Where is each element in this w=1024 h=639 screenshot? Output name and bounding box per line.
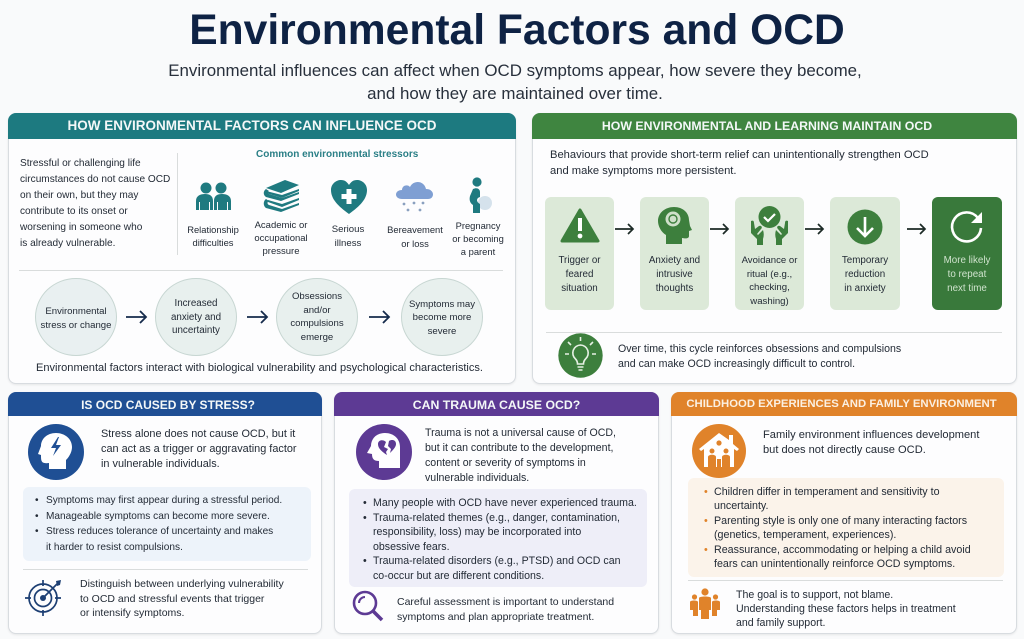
label: academic — [254, 220, 308, 257]
panel heading — [8, 113, 516, 139]
label: Trigger or — [558, 255, 601, 266]
step: environmental stress — [35, 278, 117, 356]
icon: rain cloud — [396, 182, 433, 212]
bullets — [363, 496, 637, 583]
label: relationship: Relationship — [187, 224, 239, 235]
bullets: Manageable symptoms can become more severe. — [46, 511, 270, 522]
panel: can trauma cause OCD — [334, 392, 659, 634]
lead text: content or severity of symptoms in — [425, 457, 586, 469]
flow: stress to symptoms — [35, 278, 483, 356]
lead text — [763, 428, 979, 458]
lead text: can act as a trigger or aggravating factor — [101, 443, 297, 455]
bullets: (genetics, temperament, experiences). — [714, 529, 896, 541]
note: Careful assessment is important to understand — [397, 596, 614, 608]
icon: lightbulb — [558, 333, 603, 378]
icon: repeat arrow — [950, 211, 982, 243]
icon: house with family — [692, 424, 746, 478]
label: pregnancy: or becoming — [452, 233, 504, 244]
bullets: • — [35, 511, 39, 522]
label: academic: Academic or — [255, 220, 307, 231]
step: environmental stress: Environmental — [45, 306, 107, 317]
intro text: Behaviours that provide short-term relief can unintentionally strengthen OCD — [550, 149, 929, 161]
panel heading: CHILDHOOD EXPERIENCES AND FAMILY ENVIRONMENT — [686, 398, 997, 410]
label: Avoidance or — [742, 255, 797, 266]
label: relationship — [187, 224, 239, 248]
label: relationship: difficulties — [192, 237, 234, 248]
label: serious illness — [332, 224, 364, 248]
lead text: vulnerable individuals. — [425, 472, 529, 484]
intro text: on their own, but they may — [20, 190, 138, 201]
bullet box — [23, 487, 311, 561]
label — [558, 255, 601, 294]
step: symptoms more severe — [401, 278, 483, 356]
label: academic: occupational — [254, 233, 308, 244]
icon: hands with check — [751, 206, 788, 245]
label: situation — [561, 283, 598, 294]
intro text: Stressful or challenging life — [20, 158, 141, 169]
step: avoidance — [735, 197, 804, 310]
label — [842, 255, 888, 294]
label — [742, 255, 798, 307]
bullets: • — [35, 495, 39, 506]
step: trigger — [545, 197, 614, 310]
subtitle — [168, 61, 862, 103]
lead text: Family environment influences development — [763, 429, 979, 441]
bullets: obsessive fears. — [373, 540, 450, 552]
label: checking, — [749, 282, 790, 293]
arrow — [710, 223, 730, 235]
bullets: • — [363, 497, 367, 509]
note: Distinguish between underlying vulnerability — [80, 578, 284, 590]
title: Environmental Factors and OCD — [189, 6, 845, 54]
panel heading: IS OCD CAUSED BY STRESS? — [81, 398, 255, 412]
subtitle: Environmental influences can affect when OCD symptoms appear, how severe they become, — [168, 61, 862, 80]
label: More likely — [944, 255, 990, 266]
label: thoughts — [656, 283, 693, 294]
icon: head with brain — [658, 207, 692, 244]
panel: childhood experiences and family environment — [671, 392, 1017, 634]
step: obsessions and compulsions: and/or — [303, 305, 331, 316]
note: to OCD and stressful events that trigger — [80, 592, 264, 604]
label: pregnancy — [452, 220, 504, 257]
subtitle: and how they are maintained over time. — [367, 84, 663, 103]
label: Temporary — [842, 255, 888, 266]
closing note: Over time, this cycle reinforces obsessions and compulsions — [618, 343, 901, 355]
label: pregnancy: a parent — [461, 246, 495, 257]
step: increased anxiety — [155, 278, 237, 356]
bullets: • — [35, 526, 39, 537]
panel heading: HOW ENVIRONMENTAL FACTORS CAN INFLUENCE OCD — [67, 118, 436, 133]
lead text — [101, 428, 297, 470]
lead text: in vulnerable individuals. — [101, 458, 220, 470]
arrow — [126, 310, 148, 324]
lead text: Trauma is not a universal cause of OCD, — [425, 427, 616, 439]
label: reduction — [845, 269, 885, 280]
bullet box — [688, 478, 1004, 577]
label — [648, 255, 700, 294]
bullets: • — [704, 515, 708, 527]
intro text — [550, 149, 929, 177]
footer note: Environmental factors interact with biological vulnerability and psychological characteristics. — [36, 362, 483, 374]
label: ritual (e.g., — [747, 269, 792, 280]
icon: family group — [690, 588, 720, 620]
closing note — [618, 343, 901, 370]
intro text — [20, 158, 170, 249]
step: obsessions and compulsions: compulsions — [290, 318, 344, 329]
label: serious illness: illness — [335, 238, 361, 248]
label: washing) — [750, 296, 789, 307]
icon: heart with cross — [331, 180, 367, 214]
panel heading: CAN TRAUMA CAUSE OCD? — [413, 398, 580, 412]
step: symptoms more severe: severe — [428, 326, 456, 337]
lead text: but does not directly cause OCD. — [763, 444, 926, 456]
lead text: but it can contribute to the development, — [425, 442, 613, 454]
arrow — [907, 223, 926, 235]
icon: warning triangle — [560, 208, 600, 242]
icon: head with broken heart — [356, 424, 412, 480]
label: Anxiety and — [649, 255, 700, 266]
label: bereavement: or loss — [401, 238, 429, 248]
bullets: it harder to resist compulsions. — [46, 542, 183, 553]
step: environmental stress: stress or change — [41, 320, 111, 330]
step: obsessions and compulsions: emerge — [301, 332, 333, 343]
intro text: circumstances do not cause OCD — [20, 174, 170, 185]
step: increased anxiety: uncertainty — [172, 325, 220, 336]
note: The goal is to support, not blame. — [736, 589, 893, 601]
bullets: Parenting style is only one of many interacting factors — [714, 515, 967, 527]
label: pregnancy: Pregnancy — [456, 220, 500, 231]
bullets: Symptoms may first appear during a stressful period. — [46, 495, 282, 506]
label: serious illness: Serious — [332, 224, 364, 235]
panel heading: HOW ENVIRONMENTAL AND LEARNING MAINTAIN OCD — [602, 119, 932, 133]
bullets: Trauma-related themes (e.g., danger, contamination, — [373, 512, 620, 524]
panel heading — [334, 392, 659, 416]
bullets: Many people with OCD have never experienced trauma. — [373, 497, 637, 509]
panel: is OCD caused by stress — [8, 392, 322, 634]
note — [736, 588, 956, 631]
arrow — [615, 223, 634, 235]
bullets: uncertainty. — [714, 500, 768, 512]
step: symptoms more severe: Symptoms may — [409, 299, 475, 310]
note: symptoms and plan appropriate treatment. — [397, 611, 594, 623]
bullets: Reassurance, accommodating or helping a child avoid — [714, 544, 971, 556]
label: next time — [947, 283, 987, 294]
label: feared — [566, 269, 593, 280]
bullets: • — [704, 486, 708, 498]
label: in anxiety — [844, 283, 886, 294]
bullets: • — [363, 555, 367, 567]
bullets — [35, 495, 282, 553]
bullets: co-occur but are different conditions. — [373, 570, 544, 582]
arrow — [369, 310, 390, 324]
stressors heading: Common environmental stressors — [256, 149, 418, 160]
bullets — [704, 485, 971, 571]
label: to repeat — [948, 269, 986, 280]
icon: pregnant person — [470, 177, 492, 213]
panel heading — [671, 392, 1017, 416]
bullets: Children differ in temperament and sensitivity to — [714, 486, 940, 498]
icon: down arrow circle — [848, 210, 882, 244]
bullet box — [349, 489, 647, 587]
bullets: • — [363, 512, 367, 524]
label: intrusive — [656, 269, 693, 280]
step: obsessions and compulsions: Obsessions — [292, 291, 342, 302]
lead text: Stress alone does not cause OCD, but it — [101, 428, 295, 440]
lead text — [425, 427, 616, 484]
bullets: • — [704, 544, 708, 556]
icon: head with lightning — [28, 424, 84, 480]
panel: how environmental factors can influence OCD — [8, 113, 516, 384]
bullets: Stress reduces tolerance of uncertainty and makes — [46, 526, 273, 537]
intro text: and make symptoms more persistent. — [550, 165, 737, 177]
icon: books — [264, 180, 299, 212]
panel heading — [532, 113, 1017, 139]
step: obsessions and compulsions — [276, 278, 358, 356]
arrow — [247, 310, 268, 324]
closing note: and can make OCD increasingly difficult to control. — [618, 358, 855, 370]
intro text: worsening in someone who — [20, 222, 142, 233]
step: more likely to repeat — [932, 197, 1002, 310]
bullets: fears can unintentionally reinforce OCD symptoms. — [714, 558, 955, 570]
label: bereavement — [387, 224, 443, 248]
icon: relationship people — [196, 182, 231, 210]
note — [80, 578, 284, 619]
arrow — [805, 223, 824, 235]
bullets: responsibility, loss) may be incorporated into — [373, 526, 581, 538]
label: bereavement: Bereavement — [387, 224, 443, 235]
panel: how environment and learning maintain OCD — [532, 113, 1017, 384]
label — [944, 255, 990, 294]
step: increased anxiety: anxiety and — [171, 312, 221, 322]
step: increased anxiety: Increased — [174, 298, 218, 309]
intro text: is already vulnerable. — [20, 238, 115, 249]
panel heading — [8, 392, 322, 416]
note: and family support. — [736, 617, 826, 629]
step: anxiety — [640, 197, 709, 310]
bullets: Trauma-related disorders (e.g., PTSD) and OCD can — [373, 555, 620, 567]
note: Understanding these factors helps in treatment — [736, 603, 956, 615]
step: symptoms more severe: become more — [413, 312, 471, 323]
icon: target — [25, 580, 61, 616]
icon: magnifying glass — [352, 590, 384, 622]
note: or intensify symptoms. — [80, 607, 184, 619]
step: temporary reduction — [830, 197, 900, 310]
note — [397, 595, 614, 625]
label: academic: pressure — [263, 246, 299, 257]
intro text: contribute to its onset or — [20, 206, 128, 217]
